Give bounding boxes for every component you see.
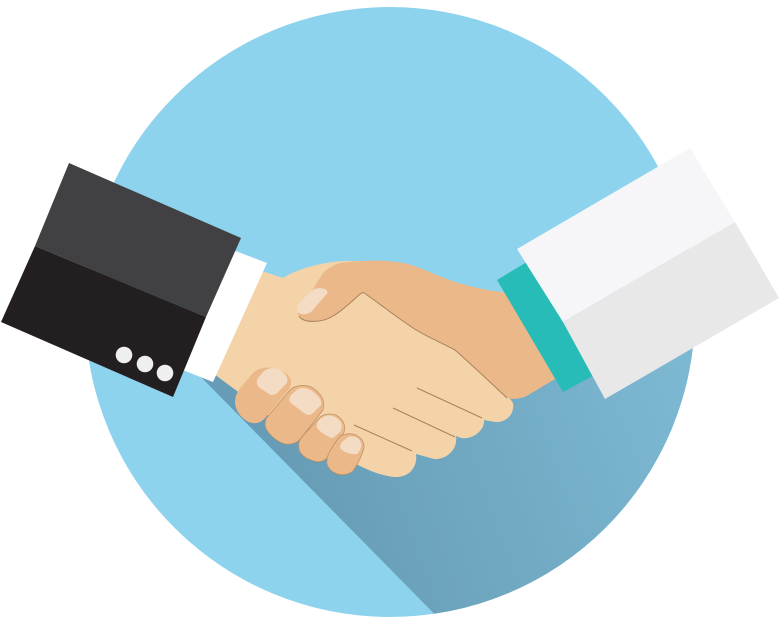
dark hand	[298, 261, 570, 399]
light hand	[200, 261, 513, 477]
finger: little	[327, 434, 364, 475]
left shirt cuff	[170, 247, 267, 382]
finger: index	[235, 367, 291, 423]
panel: right sleeve	[497, 148, 779, 399]
right coat cuff upper	[517, 148, 735, 322]
nail: ring	[317, 415, 342, 438]
hand outline crease	[299, 293, 507, 398]
left jacket cuff upper	[35, 163, 241, 317]
long shadow	[201, 348, 693, 614]
nail: little	[340, 436, 361, 454]
finger: ring	[299, 414, 345, 462]
panel: handshake hands	[200, 261, 570, 477]
panel: left sleeve	[1, 163, 267, 397]
left jacket cuff lower	[1, 246, 206, 397]
nail: index	[257, 368, 287, 395]
right coat cuff lower	[563, 222, 779, 399]
background circle	[85, 7, 695, 617]
icon: cuff buttons	[116, 347, 173, 381]
thumb nail	[297, 288, 327, 314]
finger lines	[354, 388, 482, 451]
nail: middle	[289, 388, 321, 415]
teal shirt cuff	[497, 260, 600, 392]
finger: middle	[265, 386, 324, 444]
